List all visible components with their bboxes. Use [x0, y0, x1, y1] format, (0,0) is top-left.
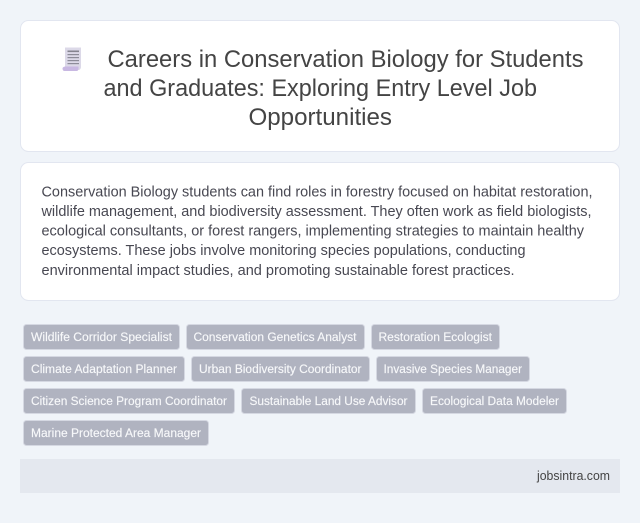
tag: Climate Adaptation Planner: Climate Adaptation Planner	[31, 362, 177, 376]
tag: Wildlife Corridor Specialist	[24, 324, 180, 350]
text block: description: environmental impact studies, and promoting sustainable forest practices.	[42, 263, 514, 279]
panel: description	[20, 162, 620, 300]
tag: Ecological Data Modeler	[422, 388, 566, 414]
tag: Restoration Ecologist: Restoration Ecologist	[378, 330, 493, 344]
tag: Marine Protected Area Manager	[24, 420, 208, 446]
title: and Graduates: Exploring Entry Level Job	[104, 75, 537, 102]
title: Careers in Conservation Biology for Students	[108, 46, 584, 73]
tag: Restoration Ecologist	[372, 324, 500, 350]
tag: Citizen Science Program Coordinator: Citizen Science Program Coordinator	[31, 394, 227, 408]
tag list: job titles	[24, 324, 566, 446]
tag: Sustainable Land Use Advisor	[242, 388, 416, 414]
tag: Invasive Species Manager	[376, 356, 530, 382]
tag: Marine Protected Area Manager: Marine Protected Area Manager	[31, 426, 201, 440]
tag: Citizen Science Program Coordinator	[24, 388, 234, 414]
footer bar	[20, 459, 620, 493]
text block: description: wildlife management, and biodiversity assessment. They often work as field biologists,	[40, 204, 591, 220]
tag: Sustainable Land Use Advisor: Sustainable Land Use Advisor	[250, 394, 408, 408]
text block: description	[40, 184, 592, 279]
icon: document scroll	[62, 48, 81, 71]
tag: Urban Biodiversity Coordinator	[192, 356, 370, 382]
tag: Climate Adaptation Planner	[24, 356, 184, 382]
footer source text: jobsintra.com	[536, 468, 610, 483]
tag: Conservation Genetics Analyst	[186, 324, 364, 350]
tag: Ecological Data Modeler: Ecological Data Modeler	[430, 394, 559, 408]
tag: Conservation Genetics Analyst: Conservation Genetics Analyst	[194, 330, 357, 344]
panel: header	[20, 20, 620, 152]
text block: description: Conservation Biology students can find roles in forestry focused on habitat restoration,	[42, 184, 592, 200]
text block: description: ecological consultants, or forest rangers, implementing strategies to maintain healthy	[42, 224, 585, 240]
tag: Invasive Species Manager: Invasive Species Manager	[384, 362, 522, 376]
title	[104, 46, 584, 131]
title: Opportunities	[248, 104, 392, 131]
text block: description: ecosystems. These jobs involve monitoring species populations, conducting	[42, 243, 526, 259]
tag: Urban Biodiversity Coordinator: Urban Biodiversity Coordinator	[199, 362, 362, 376]
tag: Wildlife Corridor Specialist: Wildlife Corridor Specialist	[31, 330, 173, 344]
